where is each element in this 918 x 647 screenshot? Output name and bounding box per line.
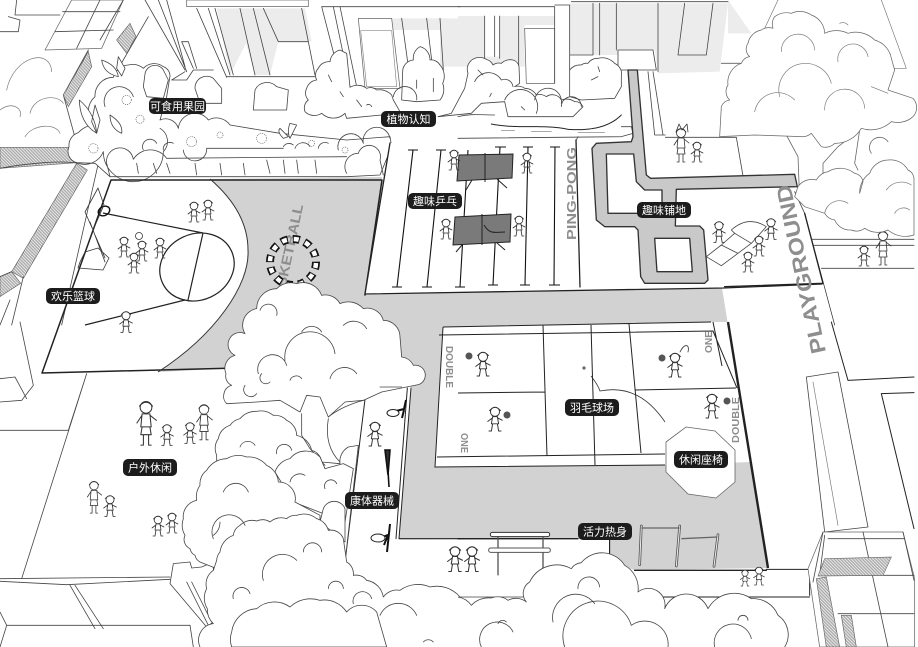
tree: bottom shrubs xyxy=(458,553,788,647)
label: 康体器械 xyxy=(345,492,399,509)
label: 休闲座椅: 休闲座椅 xyxy=(679,452,723,466)
panel: ping-pong court xyxy=(365,140,822,294)
label: 羽毛球场 xyxy=(565,399,619,416)
outdoor leisure figures xyxy=(87,402,212,536)
hopscotch xyxy=(706,222,766,266)
court captions: ONE xyxy=(703,331,715,353)
tree: top-right large canopy xyxy=(720,11,917,325)
tree: centre canopy and trunk xyxy=(224,283,425,417)
left roof and hatched walls xyxy=(0,0,148,325)
court captions xyxy=(443,331,742,453)
children at hopscotch xyxy=(713,219,777,272)
label: 植物认知: 植物认知 xyxy=(386,112,430,126)
strollers on walkway xyxy=(448,547,764,586)
panel: basketball court xyxy=(42,179,382,373)
label: 植物认知 xyxy=(381,111,436,127)
label: 户外休闲: 户外休闲 xyxy=(128,460,172,474)
label: 户外休闲 xyxy=(123,459,177,476)
badminton players xyxy=(466,346,730,431)
planting beds xyxy=(68,47,633,182)
icon: basketball hoop xyxy=(78,188,111,270)
label: 休闲座椅 xyxy=(674,451,728,468)
panel: badminton court xyxy=(435,322,768,568)
basketball players xyxy=(118,200,214,332)
label: 欢乐篮球 xyxy=(46,288,100,304)
table 2 xyxy=(453,214,511,245)
tree trunk xyxy=(302,400,363,465)
parent and child on path xyxy=(674,124,703,162)
tree: lower shrub cluster xyxy=(182,400,800,647)
table 1 xyxy=(457,154,513,181)
bottom-right glass structure xyxy=(808,532,915,647)
figures at right xyxy=(858,232,891,266)
label: 可食用果园: 可食用果园 xyxy=(150,99,205,113)
label: 欢乐篮球: 欢乐篮球 xyxy=(51,289,95,303)
ping-pong caption: PING-PONG xyxy=(565,147,579,240)
label: 趣味铺地: 趣味铺地 xyxy=(642,203,686,217)
icon: dashed ball ring xyxy=(270,239,316,285)
ping-pong players xyxy=(440,150,533,239)
fitness equipment xyxy=(368,400,406,552)
label: 趣味乒乓 xyxy=(408,193,462,209)
label: 活力热身 xyxy=(578,523,632,540)
seating octagon xyxy=(666,427,735,498)
label: 活力热身: 活力热身 xyxy=(583,524,627,538)
gray court surface xyxy=(158,177,768,570)
court captions: ONE xyxy=(458,433,470,453)
court captions: DOUBLE xyxy=(730,397,742,443)
warm-up equipment xyxy=(458,526,766,575)
label: 趣味铺地 xyxy=(637,202,691,218)
fitness lane xyxy=(345,388,460,562)
label: 康体器械: 康体器械 xyxy=(350,494,394,508)
label: 趣味乒乓: 趣味乒乓 xyxy=(413,194,457,208)
fun paving path xyxy=(592,70,797,283)
playground caption: PLAYGROUND xyxy=(773,183,831,356)
basketball caption: BASKETBALL xyxy=(268,202,306,311)
building facade xyxy=(145,0,751,135)
court captions: DOUBLE xyxy=(443,346,455,388)
label: 羽毛球场: 羽毛球场 xyxy=(570,400,614,414)
